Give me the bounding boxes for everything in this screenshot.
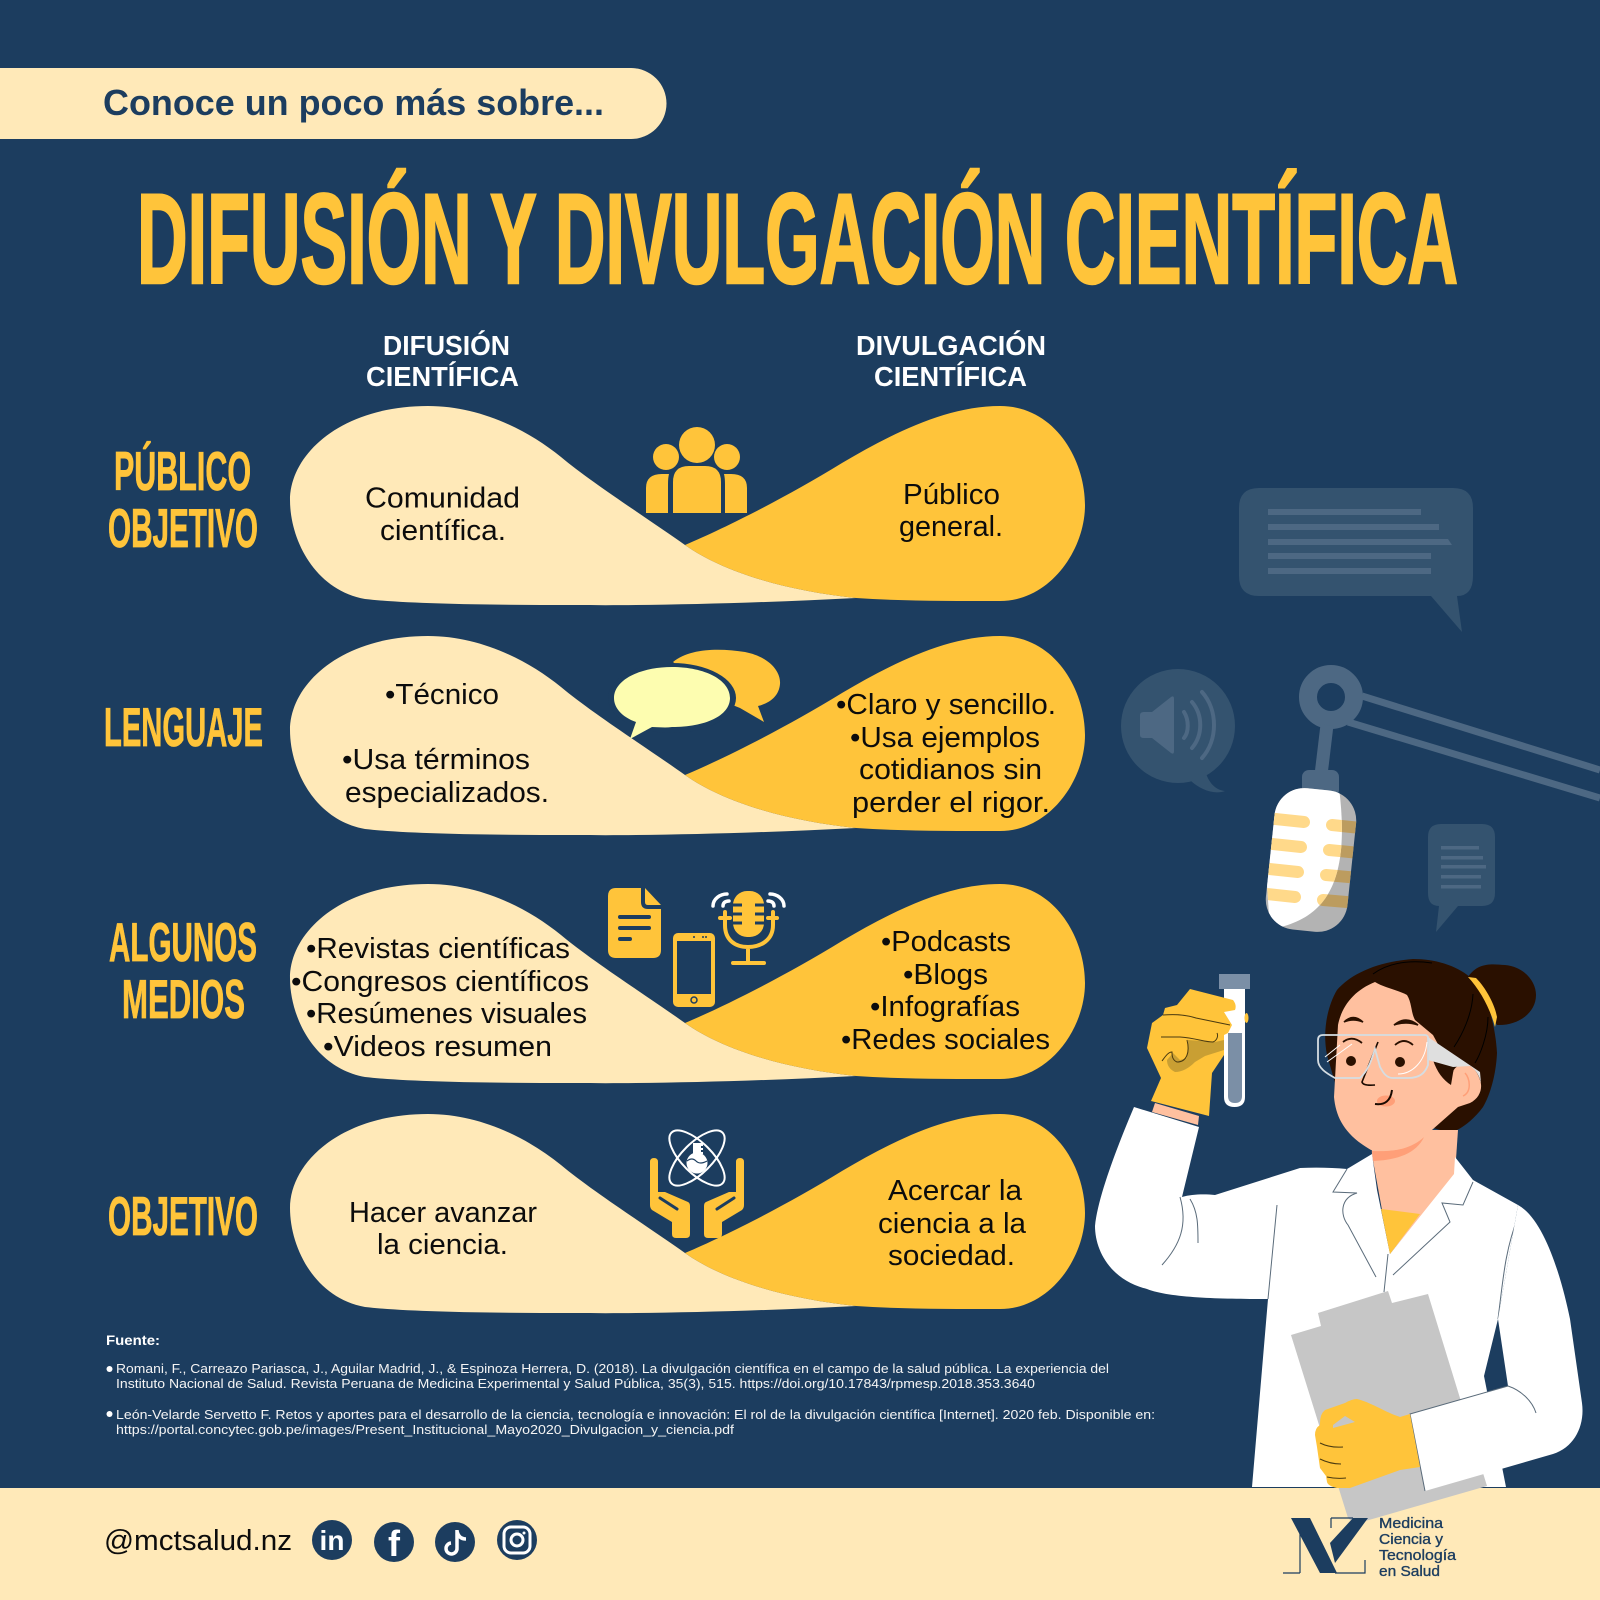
microphone on boom arm bbox=[1258, 674, 1600, 940]
row label: público objetivo: OBJETIVO bbox=[108, 497, 258, 559]
row label: lenguaje: LENGUAJE bbox=[104, 696, 263, 758]
icon: podcast microphone bbox=[713, 891, 784, 963]
text: técnico bbox=[342, 679, 549, 809]
coat lines bbox=[1162, 1169, 1518, 1319]
text: hacer avanzar la ciencia: la ciencia. bbox=[377, 1229, 508, 1261]
hair tie bbox=[1468, 977, 1497, 1027]
row label: algunos medios: MEDIOS bbox=[122, 968, 245, 1030]
sources block bbox=[106, 1332, 1155, 1437]
row label: algunos medios bbox=[109, 911, 257, 1030]
top pill banner: Conoce un poco más sobre... bbox=[103, 82, 604, 123]
icon: instagram bbox=[497, 1520, 537, 1560]
icon: facebook bbox=[374, 1522, 414, 1564]
logo: wordmark: Medicina bbox=[1379, 1516, 1444, 1532]
ear detail bbox=[1463, 1073, 1469, 1096]
cream blob bbox=[290, 636, 856, 835]
text: podcasts y blogs: •Blogs bbox=[903, 959, 988, 991]
text: revistas y congresos: •Congresos científicos bbox=[291, 966, 589, 998]
sources block: https://portal.concytec.gob.pe/images/Present_Institucional_Mayo2020_Divulgacion_y_ciencia.pdf bbox=[116, 1422, 734, 1437]
text: acercar la ciencia: sociedad. bbox=[888, 1240, 1015, 1272]
neck bbox=[1371, 1130, 1458, 1254]
column heading: difusión: CIENTÍFICA bbox=[366, 361, 519, 392]
gold blob bbox=[685, 884, 1085, 1079]
top pill banner bbox=[0, 68, 666, 139]
icon: document bbox=[608, 888, 661, 958]
row label: objetivo: OBJETIVO bbox=[108, 1185, 258, 1247]
text: público general bbox=[899, 479, 1003, 543]
text: acercar la ciencia bbox=[878, 1175, 1027, 1272]
text: claro y sencillo: •Usa ejemplos bbox=[850, 722, 1040, 754]
text: claro y sencillo bbox=[836, 689, 1056, 819]
row label: público objetivo bbox=[108, 440, 258, 559]
gold blob bbox=[685, 636, 1085, 831]
test tube bbox=[1219, 974, 1250, 1107]
row 3: medios comparison bbox=[290, 884, 1085, 1083]
logo: wordmark: Tecnología bbox=[1379, 1548, 1457, 1564]
social handle: @mctsalud.nz bbox=[104, 1525, 292, 1557]
text: comunidad científica: científica. bbox=[380, 515, 506, 547]
text: claro y sencillo: cotidianos sin bbox=[859, 754, 1042, 786]
icon: facebook: f bbox=[388, 1523, 401, 1564]
decorative speech bubble with speaker bbox=[1121, 669, 1235, 792]
text: podcasts y blogs bbox=[841, 926, 1050, 1056]
sources block: Instituto Nacional de Salud. Revista Peruana de Medicina Experimental y Salud Pública, 35(3), 515. https://doi.org/10.17843/rpmesp.2018.353.3640 bbox=[116, 1376, 1035, 1391]
mouth bbox=[1375, 1090, 1395, 1106]
text: revistas y congresos: •Revistas científicas bbox=[306, 933, 570, 965]
logo: wordmark bbox=[1379, 1516, 1457, 1580]
text: público general: Público bbox=[903, 479, 1000, 511]
text: acercar la ciencia: Acercar la bbox=[888, 1175, 1023, 1207]
column heading: divulgación: DIVULGACIÓN bbox=[856, 330, 1046, 361]
text: técnico: •Usa términos bbox=[342, 744, 530, 776]
gold blob bbox=[685, 1114, 1085, 1309]
icon: linkedin: in bbox=[320, 1525, 344, 1556]
sources block: Fuente: bbox=[106, 1332, 160, 1348]
text: podcasts y blogs: •Redes sociales bbox=[841, 1024, 1050, 1056]
icon: hands holding atom and flask bbox=[650, 1122, 744, 1238]
icon: people bbox=[646, 427, 747, 513]
eyes bbox=[1343, 1039, 1413, 1067]
icon: tiktok bbox=[435, 1522, 475, 1562]
text: revistas y congresos: •Resúmenes visuales bbox=[306, 998, 587, 1030]
scientist illustration bbox=[1095, 959, 1583, 1524]
right sleeve bbox=[1410, 1205, 1583, 1491]
nose bbox=[1362, 1042, 1378, 1085]
decorative speech bubble, small bbox=[1428, 824, 1495, 932]
decorative speech bubble, large bbox=[1239, 488, 1473, 632]
text: revistas y congresos: •Videos resumen bbox=[323, 1031, 552, 1063]
bullet bbox=[106, 1366, 112, 1372]
text: podcasts y blogs: •Podcasts bbox=[881, 926, 1011, 958]
text: público general: general. bbox=[899, 511, 1003, 543]
raised hand glove bbox=[1147, 989, 1236, 1116]
hair bun bbox=[1468, 964, 1536, 1025]
column heading: divulgación: CIENTÍFICA bbox=[874, 361, 1027, 392]
logo: NZ mark bbox=[1283, 1518, 1368, 1573]
shirt bbox=[1381, 1209, 1420, 1254]
column heading: difusión: DIFUSIÓN bbox=[383, 330, 510, 361]
lower hand glove bbox=[1315, 1399, 1420, 1488]
cream blob bbox=[290, 1114, 856, 1313]
lab coat torso bbox=[1095, 1107, 1518, 1487]
hair strands bbox=[1373, 962, 1488, 1063]
sources block: Romani, F., Carreazo Pariasca, J., Aguilar Madrid, J., & Espinoza Herrera, D. (2018). La divulgación científica en el campo de la salud pública. La experiencia del bbox=[116, 1361, 1109, 1376]
clipboard bbox=[1291, 1291, 1487, 1524]
text: acercar la ciencia: ciencia a la bbox=[878, 1208, 1027, 1240]
row 1: público objetivo comparison bbox=[290, 406, 1085, 605]
safety glasses bbox=[1318, 1035, 1481, 1083]
text: hacer avanzar la ciencia bbox=[349, 1197, 537, 1261]
row label: algunos medios: ALGUNOS bbox=[109, 911, 257, 973]
face bbox=[1334, 982, 1481, 1151]
hair back bbox=[1325, 959, 1497, 1130]
row 4: objetivo comparison bbox=[290, 1114, 1085, 1313]
text: hacer avanzar la ciencia: Hacer avanzar bbox=[349, 1197, 537, 1229]
column heading: difusión bbox=[366, 330, 519, 392]
footer band bbox=[0, 1488, 1600, 1600]
eyebrows bbox=[1344, 1018, 1418, 1025]
logo: wordmark: en Salud bbox=[1379, 1564, 1440, 1580]
column heading: divulgación bbox=[856, 330, 1046, 392]
cream blob bbox=[290, 406, 856, 605]
bullet bbox=[106, 1411, 112, 1417]
text: técnico: especializados. bbox=[345, 777, 549, 809]
text: comunidad científica bbox=[365, 482, 520, 547]
hair notch below glasses arm bbox=[1433, 1060, 1454, 1085]
text: técnico: •Técnico bbox=[385, 679, 499, 711]
text: comunidad científica: Comunidad bbox=[365, 482, 520, 514]
text: podcasts y blogs: •Infografías bbox=[870, 991, 1020, 1023]
row label: público objetivo: PÚBLICO bbox=[114, 440, 251, 502]
neck shadow bbox=[1372, 1137, 1424, 1161]
gold blob bbox=[685, 406, 1085, 601]
logo: wordmark: Ciencia y bbox=[1379, 1532, 1444, 1548]
icon: chat bubbles bbox=[608, 650, 780, 739]
icon: linkedin bbox=[312, 1520, 352, 1560]
icon: phone bbox=[673, 933, 715, 1007]
text: claro y sencillo: perder el rigor. bbox=[852, 787, 1050, 819]
row 2: lenguaje comparison bbox=[290, 636, 1085, 835]
wrist bbox=[1152, 1103, 1199, 1125]
text: revistas y congresos bbox=[291, 933, 589, 1063]
sources block: León-Velarde Servetto F. Retos y aportes para el desarrollo de la ciencia, tecnología e innovación: El rol de la divulgación científica [Internet]. 2020 feb. Disponible en: bbox=[116, 1407, 1155, 1422]
cream blob bbox=[290, 884, 856, 1083]
text: claro y sencillo: •Claro y sencillo. bbox=[836, 689, 1056, 721]
